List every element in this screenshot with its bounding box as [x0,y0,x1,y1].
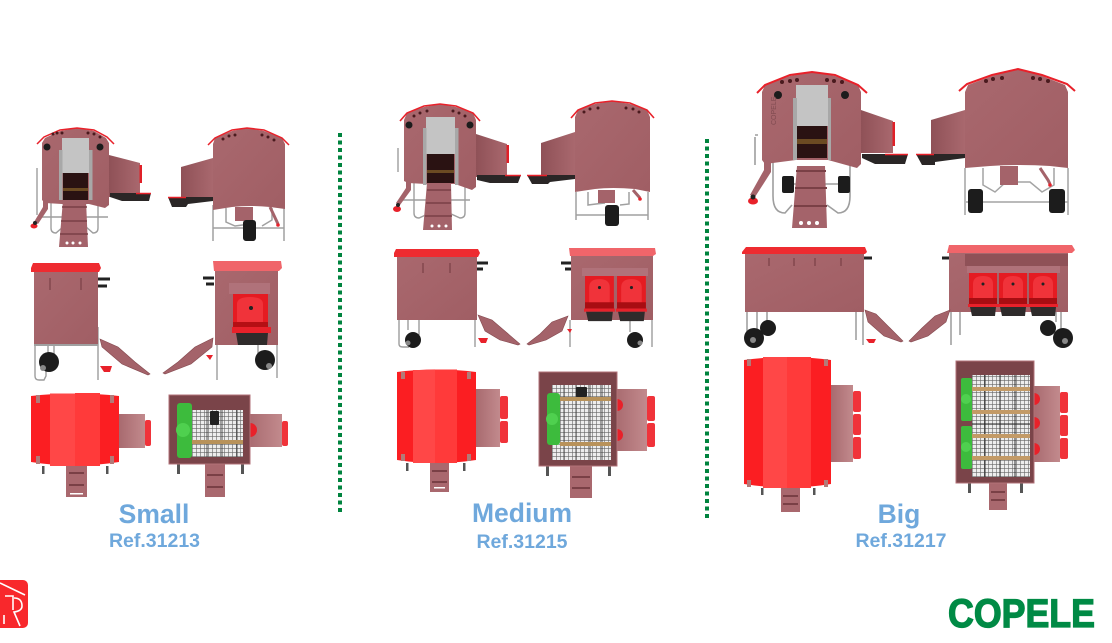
medium coop plain side view [394,249,520,348]
small coop top inside [169,395,288,497]
medium size label: Medium [472,498,572,528]
divider left [338,133,342,513]
medium coop back view [527,101,654,226]
big coop front view: COPELE [771,96,778,125]
big coop back view [916,69,1075,215]
small reference: Ref.31213 [109,530,200,552]
icon: red rooster logo [0,580,28,628]
big size label: Big [878,499,920,529]
medium coop front view [393,104,521,230]
divider right [705,139,709,518]
small size label: Small [119,499,189,529]
big coop top cover [744,357,861,512]
small coop top cover [31,393,151,497]
small coop plain side view [31,263,150,380]
big reference: Ref.31217 [855,530,947,552]
small coop nest side view [163,261,282,380]
big coop nest side view [909,245,1075,348]
small coop front view [30,128,151,247]
medium reference: Ref.31215 [476,531,568,553]
big coop plain side view [742,247,903,348]
small coop back view [168,128,289,241]
big coop front view [748,72,908,228]
big coop top inside [956,361,1068,510]
medium coop top inside [539,372,655,498]
logo: Copele: COPELE [948,592,1095,636]
medium coop nest side view [527,248,656,348]
medium coop top cover [397,370,508,492]
